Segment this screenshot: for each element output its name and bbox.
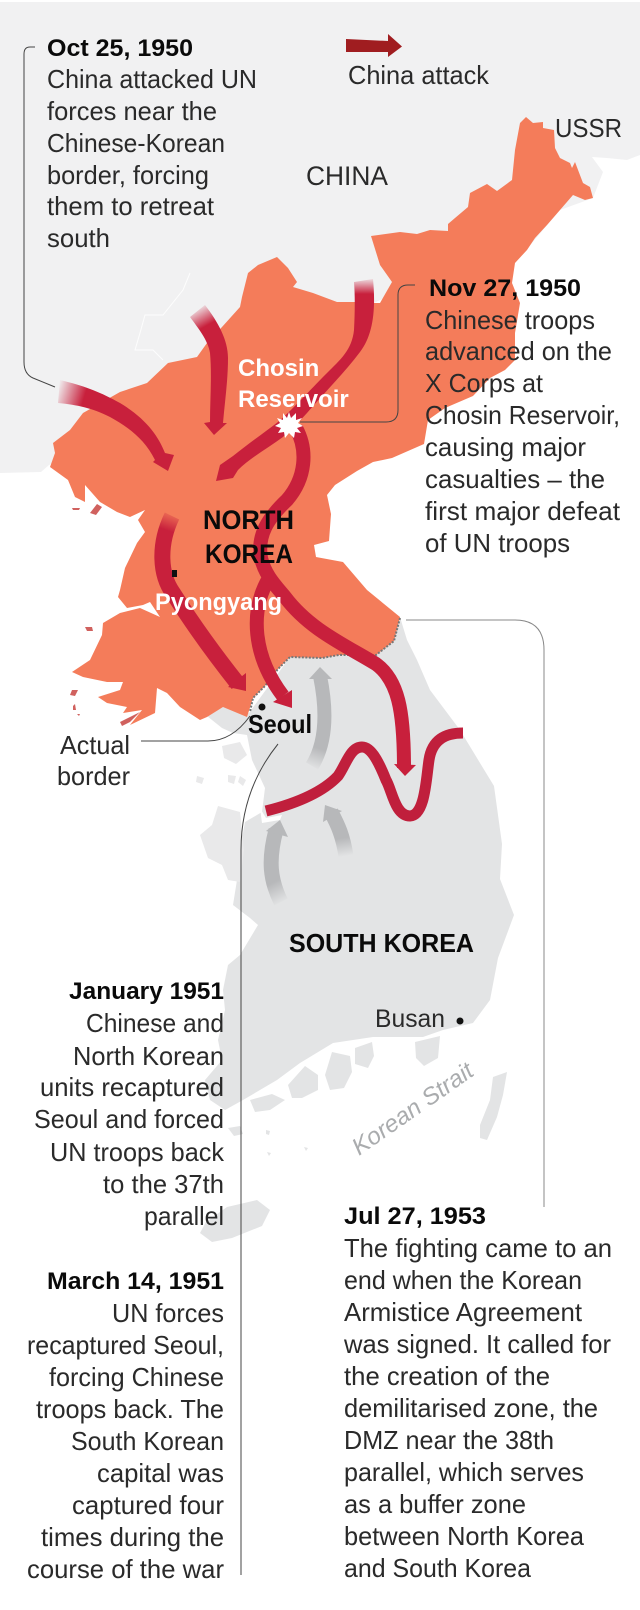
front line (266, 733, 463, 816)
text block: Nov 27, 1950: X Corps at (425, 368, 544, 398)
grey arrow: west (271, 830, 281, 902)
text block: Jul 27, 1953: Jul 27, 1953 (344, 1203, 486, 1230)
text block: January 1951: North Korean (73, 1041, 224, 1071)
label: North Korea: NORTH (203, 505, 294, 535)
leader lines (24, 47, 544, 1575)
text block: January 1951 (34, 978, 225, 1231)
arrow: west (58, 380, 174, 471)
text block: March 14, 1951: recaptured Seoul, (27, 1330, 224, 1360)
label: border: border (57, 761, 130, 791)
text block: Nov 27, 1950: Chinese troops (425, 305, 595, 335)
label: USSR: USSR (555, 113, 622, 143)
text block: Nov 27, 1950: Chosin Reservoir, (425, 400, 620, 430)
map background: China and USSR land (0, 2, 640, 473)
legend (346, 34, 490, 90)
arrow: north (190, 305, 228, 435)
label: Seoul: Seoul (248, 709, 312, 739)
label: North Korea second line: KOREA (205, 539, 293, 569)
text block: March 14, 1951: troops back. The (36, 1394, 224, 1424)
text block: January 1951: to the 37th (103, 1169, 224, 1199)
text block: Jul 27, 1953: was signed. It called for (343, 1329, 611, 1359)
text block: March 14, 1951 (27, 1268, 224, 1584)
text block: March 14, 1951: South Korean (71, 1426, 224, 1456)
map: North Korea (50, 117, 593, 726)
text block: March 14, 1951: March 14, 1951 (47, 1268, 224, 1295)
label: Chosin Reservoir: Reservoir (238, 386, 349, 413)
arrow: long route south (260, 428, 404, 768)
grey arrow: centre (331, 812, 346, 856)
text block: Nov 27, 1950: of UN troops (425, 528, 570, 558)
text block: Jul 27, 1953: The fighting came to an (344, 1233, 612, 1263)
text block: Jul 27, 1953 (343, 1203, 612, 1583)
text block: Nov 27, 1950: casualties – the (425, 464, 605, 494)
leader: Actual border (141, 716, 250, 741)
arrow: branch to Seoul (257, 578, 283, 696)
text block: Oct 25, 1950: border, forcing (47, 160, 209, 190)
text block: January 1951: January 1951 (69, 978, 224, 1005)
text block: March 14, 1951: forcing Chinese (49, 1362, 224, 1392)
text block: Nov 27, 1950: Nov 27, 1950 (429, 275, 581, 302)
western islands (196, 742, 247, 882)
text block: Nov 27, 1950 (425, 275, 621, 558)
grey arrow: north to Seoul region (312, 676, 324, 766)
text block: Nov 27, 1950: causing major (425, 432, 586, 462)
text block: January 1951: parallel (144, 1201, 224, 1231)
river lines in China (135, 273, 190, 360)
text block: March 14, 1951: UN forces (112, 1298, 224, 1328)
white coast fleck (260, 808, 282, 823)
text block: March 14, 1951: capital was (97, 1458, 224, 1488)
text block: Oct 25, 1950: them to retreat (47, 191, 215, 221)
leader: Nov 27 (300, 285, 415, 422)
text block: March 14, 1951: course of the war (27, 1554, 224, 1584)
label: Busan: Busan (375, 1005, 445, 1033)
leader: Oct 25 (24, 47, 55, 387)
text block: March 14, 1951: times during the (41, 1522, 224, 1552)
text block: Jul 27, 1953: between North Korea (344, 1521, 585, 1551)
southern islets (228, 1036, 440, 1156)
text block: Jul 27, 1953: parallel, which serves (344, 1457, 584, 1487)
text block: Jul 27, 1953: Armistice Agreement (344, 1297, 583, 1327)
marker: Pyongyang (172, 570, 177, 577)
text block: Nov 27, 1950: advanced on the (425, 336, 612, 366)
island: Jeju (200, 1200, 270, 1242)
text block: Jul 27, 1953: DMZ near the 38th (344, 1425, 554, 1455)
legend arrow (346, 34, 402, 57)
island: Tsushima (480, 1072, 507, 1140)
label: Korean Strait: Korean Strait (347, 1057, 480, 1161)
label: Chosin Reservoir: Chosin (238, 355, 319, 382)
text block: Nov 27, 1950: first major defeat (425, 496, 621, 526)
text block: Jul 27, 1953: the creation of the (344, 1361, 550, 1391)
leader: January 1951 (241, 744, 278, 1575)
text block: March 14, 1951: captured four (72, 1490, 224, 1520)
text block: Jul 27, 1953: demilitarised zone, the (344, 1393, 598, 1423)
islands west coast (70, 504, 140, 726)
label: CHINA: CHINA (306, 161, 388, 191)
leader: Jul 27, 1953 (406, 620, 544, 1207)
text block: Oct 25, 1950: south (47, 223, 110, 253)
text block: Oct 25, 1950: forces near the (47, 96, 217, 126)
arrow: toward Chosin then south-west (216, 279, 374, 481)
border: actual border dotted line (250, 618, 400, 712)
text block: Oct 25, 1950: China attacked UN (47, 64, 257, 94)
text block: Jul 27, 1953: and South Korea (344, 1553, 532, 1583)
text block: Jul 27, 1953: end when the Korean (344, 1265, 582, 1295)
label: South Korea: SOUTH KOREA (289, 928, 474, 958)
icon: explosion at Chosin Reservoir (275, 412, 303, 438)
text block: January 1951: Seoul and forced (34, 1104, 224, 1134)
arrows: China attack routes (58, 279, 416, 776)
arrow: via Pyongyang (162, 516, 238, 684)
label: Pyongyang: Pyongyang (155, 589, 282, 616)
marker: Seoul (258, 704, 266, 710)
text block: Oct 25, 1950: Chinese-Korean (47, 128, 225, 158)
text block: January 1951: Chinese and (86, 1008, 224, 1038)
marker: Busan (456, 1018, 464, 1024)
text block: Oct 25, 1950: Oct 25, 1950 (47, 35, 193, 62)
arrows: UN counter-attack (266, 667, 346, 902)
map labels (57, 113, 622, 1161)
legend label: China attack (348, 60, 490, 90)
text block: Oct 25, 1950 (47, 35, 257, 253)
text block: January 1951: UN troops back (50, 1137, 225, 1167)
text block: Jul 27, 1953: as a buffer zone (344, 1489, 526, 1519)
label: Actual: Actual (60, 730, 130, 760)
text block: January 1951: units recaptured (40, 1072, 224, 1102)
map: South Korea (196, 617, 514, 1242)
